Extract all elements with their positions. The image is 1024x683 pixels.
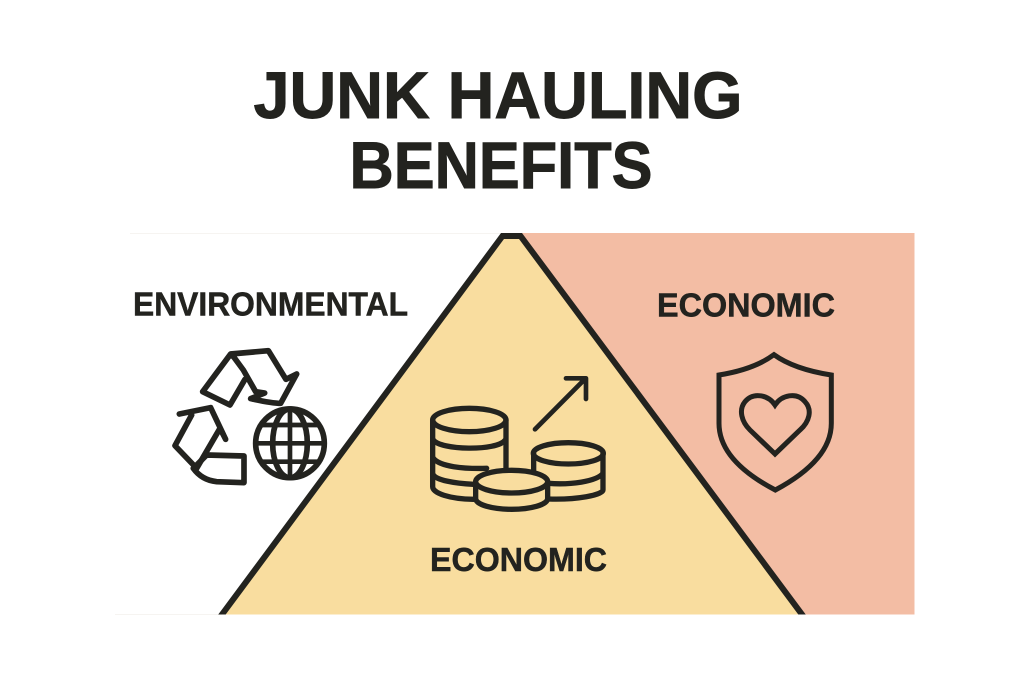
- label: economic pyramid: ECONOMIC: [430, 541, 607, 578]
- infographic: [115, 72, 914, 615]
- title: JUNK HAULING: [254, 59, 742, 132]
- title: [254, 59, 742, 202]
- panel: economic right: [520, 233, 914, 614]
- label: economic right: ECONOMIC: [657, 286, 835, 324]
- label: environmental: ENVIRONMENTAL: [133, 286, 408, 322]
- panel: economic pyramid: [219, 236, 805, 618]
- icon: shield with heart: [719, 355, 831, 490]
- icon: recycling arrows and globe: [175, 351, 324, 483]
- title: BENEFITS: [350, 129, 652, 202]
- icon: coins with rising arrow: [433, 378, 603, 509]
